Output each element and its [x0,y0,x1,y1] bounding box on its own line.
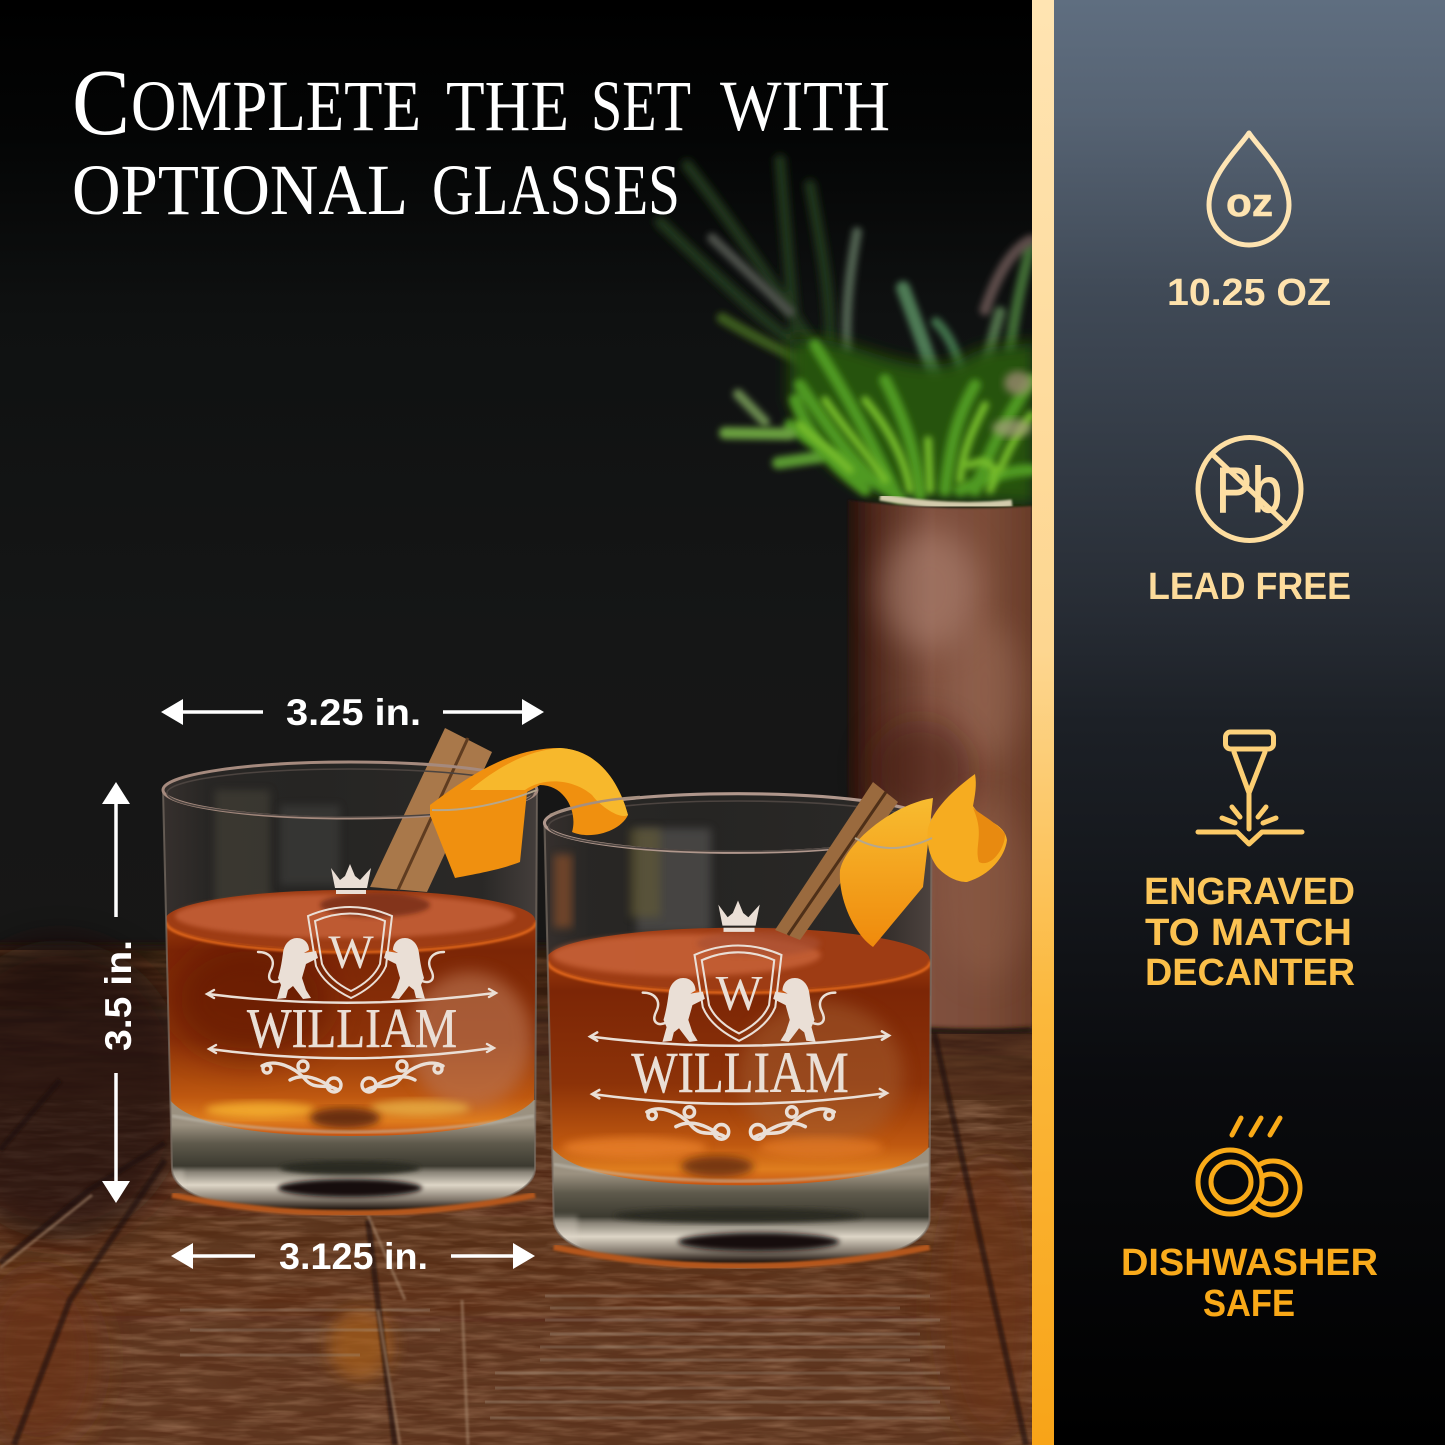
right glass outline and rim [544,794,932,1268]
feature: engraving [1144,732,1355,994]
left glass outline and rim [163,762,537,1215]
right lion [384,938,444,999]
monogram W: W [716,964,763,1020]
name: WILLIAM [247,998,457,1060]
name: WILLIAM [631,1040,849,1105]
crown [718,900,760,932]
icon: drop with oz: oz [1226,181,1273,225]
copper cup [848,497,1032,1032]
upper arrow line [207,989,496,1003]
panel: features [1054,0,1445,1445]
left glass body [160,755,540,1220]
flourish [262,1061,443,1092]
gold vertical strip [1032,0,1054,1445]
right engraving [590,900,889,1139]
left glass [160,728,540,1220]
title: THE [446,66,569,146]
monogram W: W [328,926,374,979]
label: DISHWASHER [1121,1242,1378,1284]
label: LEAD FREE [1148,566,1351,608]
right lion [773,978,835,1042]
dimension: 3.125 in. base [171,1236,535,1277]
plant [660,160,1035,505]
right glass body [541,786,935,1273]
flourish [647,1107,834,1139]
title: OPTIONAL [72,150,408,230]
dimension: 3.125 in. base: 3.125 in. [279,1236,428,1277]
feature: lead free [1148,438,1351,608]
dimension: 3.25 in. width: 3.25 in. [286,692,421,733]
left orange peel [430,748,640,878]
title: GLASSES [432,150,680,230]
label [1121,1242,1378,1325]
left lion [643,978,705,1042]
crown [331,864,371,894]
label: ENGRAVED [1144,871,1355,913]
icon: plates [1198,1118,1300,1215]
right cinnamon stick [775,782,898,940]
icon: drop with oz [1209,133,1289,245]
right orange peel [840,774,1007,947]
upper arrow line [590,1031,889,1046]
feature: capacity [1167,133,1331,314]
title [72,51,890,230]
title: C [72,51,130,155]
left engraving [207,864,496,1092]
right glass [541,786,935,1273]
icon: no lead [1198,438,1301,540]
photo: whiskey glasses on a wooden table [0,150,1032,1445]
cinnamon stick in left glass [370,728,492,892]
lower arrow line [209,1044,494,1058]
lower arrow line [592,1089,887,1104]
left lion [258,938,318,999]
title: WITH [720,66,890,146]
title: SET [591,66,691,146]
dimension: 3.5 in. height: 3.5 in. [98,940,139,1051]
dark background wall [0,183,1032,946]
shield [695,945,781,1041]
dimension: 3.5 in. height [98,782,139,1203]
left liquid [165,890,536,1136]
label: DECANTER [1145,952,1355,994]
dimension: 3.25 in. width [161,698,544,726]
wood grain [0,940,1040,1445]
table surface [0,945,1050,1445]
label: TO MATCH [1145,912,1352,954]
label [1144,871,1355,994]
label: 10.25 OZ [1167,272,1331,314]
feature: dishwasher [1121,1118,1378,1325]
right liquid [547,928,931,1185]
label: SAFE [1203,1283,1295,1325]
icon: laser engraver [1198,732,1302,844]
icon: no lead: Pb [1216,454,1282,526]
shield [308,907,392,998]
title: OMPLETE [131,66,421,146]
